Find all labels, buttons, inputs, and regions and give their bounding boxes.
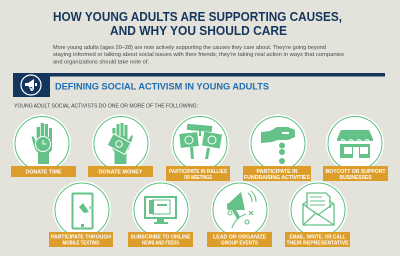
item: fundraising [249, 114, 307, 172]
item: rallies [171, 114, 229, 172]
label: group events [207, 232, 272, 247]
icon: storefront [337, 130, 373, 158]
label: group events: LEAD OR ORGANIZE [213, 235, 266, 241]
icon: envelope with letter [303, 193, 334, 225]
item: group events [211, 181, 269, 239]
label: mobile texting [49, 232, 113, 247]
title [53, 10, 342, 38]
label: donate time [11, 166, 76, 177]
label: boycott: BUSINESSES [340, 175, 372, 181]
label: fundraising: PARTICIPATE IN [256, 169, 298, 175]
label: fundraising: FUNDRAISING ACTIVITIES [244, 175, 310, 181]
item: donate time [13, 114, 71, 172]
icon: phone with megaphone [72, 194, 92, 228]
item: online news [132, 181, 190, 239]
label: online news [128, 232, 193, 247]
icon: megaphone badge [21, 75, 41, 95]
label: donate money [88, 166, 153, 177]
icon: monitor with newspaper [145, 197, 176, 224]
label: boycott: BOYCOTT OR SUPPORT [326, 169, 386, 175]
section heading: DEFINING SOCIAL ACTIVISM IN YOUNG ADULTS [55, 82, 270, 92]
label: email [285, 232, 350, 247]
icon: protest signs [179, 124, 222, 159]
label: online news: SUBSCRIBE TO ONLINE [130, 235, 191, 241]
label: fundraising [243, 166, 311, 181]
icon: hand with banknote [107, 123, 133, 164]
subheading: YOUNG ADULT SOCIAL ACTIVISTS DO ONE OR MORE OF THE FOLLOWING: [14, 104, 198, 110]
item: mobile texting [53, 181, 111, 239]
label: group events: GROUP EVENTS [221, 240, 258, 246]
title: HOW YOUNG ADULTS ARE SUPPORTING CAUSES, [53, 10, 342, 24]
label: email: THEIR REPRESENTATIVE [286, 240, 349, 246]
label: boycott [323, 166, 388, 181]
label: donate money: DONATE MONEY [98, 170, 143, 176]
item: donate money [92, 114, 150, 172]
intro paragraph: staying informed or talking about social issues with their friends; they're taking real action in ways that companies [53, 52, 345, 58]
section header bar [13, 73, 385, 97]
label: rallies: OR MEETINGS [184, 175, 212, 181]
icon: hand dropping coins [261, 127, 295, 164]
item: email [289, 181, 347, 239]
intro paragraph: More young adults (ages 20–28) are now actively supporting the causes they care about. They're going beyond [53, 45, 326, 51]
label: donate time: DONATE TIME [26, 170, 62, 176]
icon: hand with clock [32, 123, 52, 164]
label: rallies: PARTICIPATE IN RALLIES [169, 169, 227, 175]
icon: megaphone with play diagram [227, 191, 256, 228]
intro paragraph: and organizations should take note of. [53, 60, 149, 66]
intro paragraph [53, 45, 345, 66]
title: AND WHY YOU SHOULD CARE [110, 24, 287, 38]
label: online news: NEWS AND FEEDS [142, 240, 179, 246]
label: mobile texting: PARTICIPATE THROUGH [51, 235, 111, 241]
label: email: EMAIL, WRITE, OR CALL [290, 235, 346, 241]
item: boycott [326, 114, 384, 172]
label: mobile texting: MOBILE TEXTING [62, 240, 100, 246]
label: rallies [166, 166, 230, 181]
